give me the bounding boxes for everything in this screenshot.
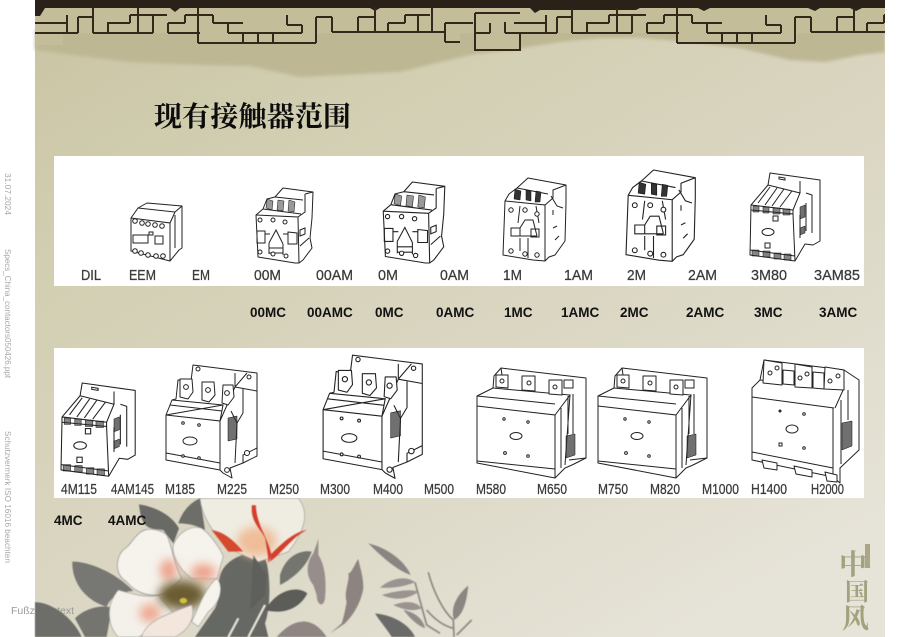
- model labels, lower row: M250: [269, 482, 299, 498]
- MC model labels, second row: [54, 513, 147, 528]
- side note: file name: Specs_China_contactors050426.ppt: [3, 249, 12, 379]
- model labels, top row: DIL: [81, 268, 101, 284]
- icon: 4M115 contactor: [61, 383, 135, 476]
- side note: copyright: Schutzvermerk ISO 16016 beachten: [3, 431, 12, 563]
- model labels, top row: 0AM: [440, 268, 469, 284]
- icon: H1400 contactor: [752, 360, 859, 483]
- bud and right-hand sprigs: [250, 505, 472, 637]
- MC model labels, first row: 2AMC: [686, 305, 725, 320]
- model labels, top row: 1AM: [564, 268, 593, 284]
- decorative lattice header: [35, 0, 920, 60]
- icon: EEM contactor: [131, 203, 182, 261]
- model labels, top row: 0M: [378, 268, 398, 284]
- calligraphy mark: [839, 543, 870, 636]
- panel: top contactor range: [54, 156, 864, 286]
- model labels, lower row: [61, 482, 844, 498]
- ink wash under the lattice: [35, 30, 885, 77]
- model labels, top row: 2AM: [688, 268, 717, 284]
- flower painting: [35, 498, 472, 637]
- MC model labels, first row: 00AMC: [307, 305, 353, 320]
- model labels, top row: 00AM: [316, 268, 353, 284]
- MC model labels, first row: 3AMC: [819, 305, 858, 320]
- model labels, lower row: M185: [165, 482, 195, 498]
- MC model labels, second row: 4AMC: [108, 513, 147, 528]
- MC model labels, first row: 2MC: [620, 305, 649, 320]
- MC model labels, first row: 00MC: [250, 305, 286, 320]
- icon: 0M contactor: [383, 182, 445, 263]
- icon: M185 contactor: [166, 365, 257, 478]
- model labels, lower row: H1400: [751, 482, 787, 498]
- model labels, top row: 2M: [627, 268, 646, 284]
- calligraphy mark: 中: [839, 543, 867, 583]
- model labels, lower row: 4AM145: [111, 482, 154, 498]
- title: 现有接触器范围: [154, 101, 351, 133]
- icon: M580 contactor: [477, 368, 586, 478]
- model labels, lower row: M400: [373, 482, 403, 498]
- icon: 3M80 contactor: [750, 173, 820, 261]
- model labels, top row: EEM: [129, 268, 156, 284]
- model labels, lower row: M580: [476, 482, 506, 498]
- MC model labels, second row: 4MC: [54, 513, 83, 528]
- model labels, lower row: M750: [598, 482, 628, 498]
- side note: date: 31.07.2024: [3, 173, 12, 216]
- icon: 2M contactor: [626, 170, 695, 261]
- MC model labels, first row: 1MC: [504, 305, 533, 320]
- icon: 1M contactor: [503, 178, 566, 261]
- MC model labels, first row: 1AMC: [561, 305, 600, 320]
- MC model labels, first row: 3MC: [754, 305, 783, 320]
- model labels, top row: 00M: [254, 268, 281, 284]
- model labels, lower row: H2000: [811, 482, 844, 498]
- model labels, lower row: M1000: [702, 482, 739, 498]
- MC model labels, first row: [250, 305, 858, 320]
- model labels, top row: 3AM85: [814, 268, 860, 284]
- icon: M300 contactor: [323, 355, 422, 478]
- model labels, lower row: M500: [424, 482, 454, 498]
- model labels, lower row: M650: [537, 482, 567, 498]
- calligraphy mark: 国: [845, 572, 869, 607]
- panel: lower contactor range: [54, 348, 864, 498]
- model labels, top row: EM: [192, 268, 210, 284]
- footer text: Fußzeilentext: [11, 605, 74, 617]
- model labels, lower row: 4M115: [61, 482, 97, 498]
- MC model labels, first row: 0AMC: [436, 305, 475, 320]
- model labels, lower row: M300: [320, 482, 350, 498]
- model labels, lower row: M225: [217, 482, 247, 498]
- model labels, top row: [81, 268, 860, 284]
- model labels, lower row: M820: [650, 482, 680, 498]
- MC model labels, first row: 0MC: [375, 305, 404, 320]
- icon: 00M contactor: [256, 188, 313, 263]
- model labels, top row: 3M80: [751, 268, 787, 284]
- main blossom and dark leaves: [35, 498, 305, 637]
- model labels, top row: 1M: [503, 268, 522, 284]
- calligraphy mark: 风: [842, 597, 869, 636]
- icon: M750 contactor: [598, 368, 707, 478]
